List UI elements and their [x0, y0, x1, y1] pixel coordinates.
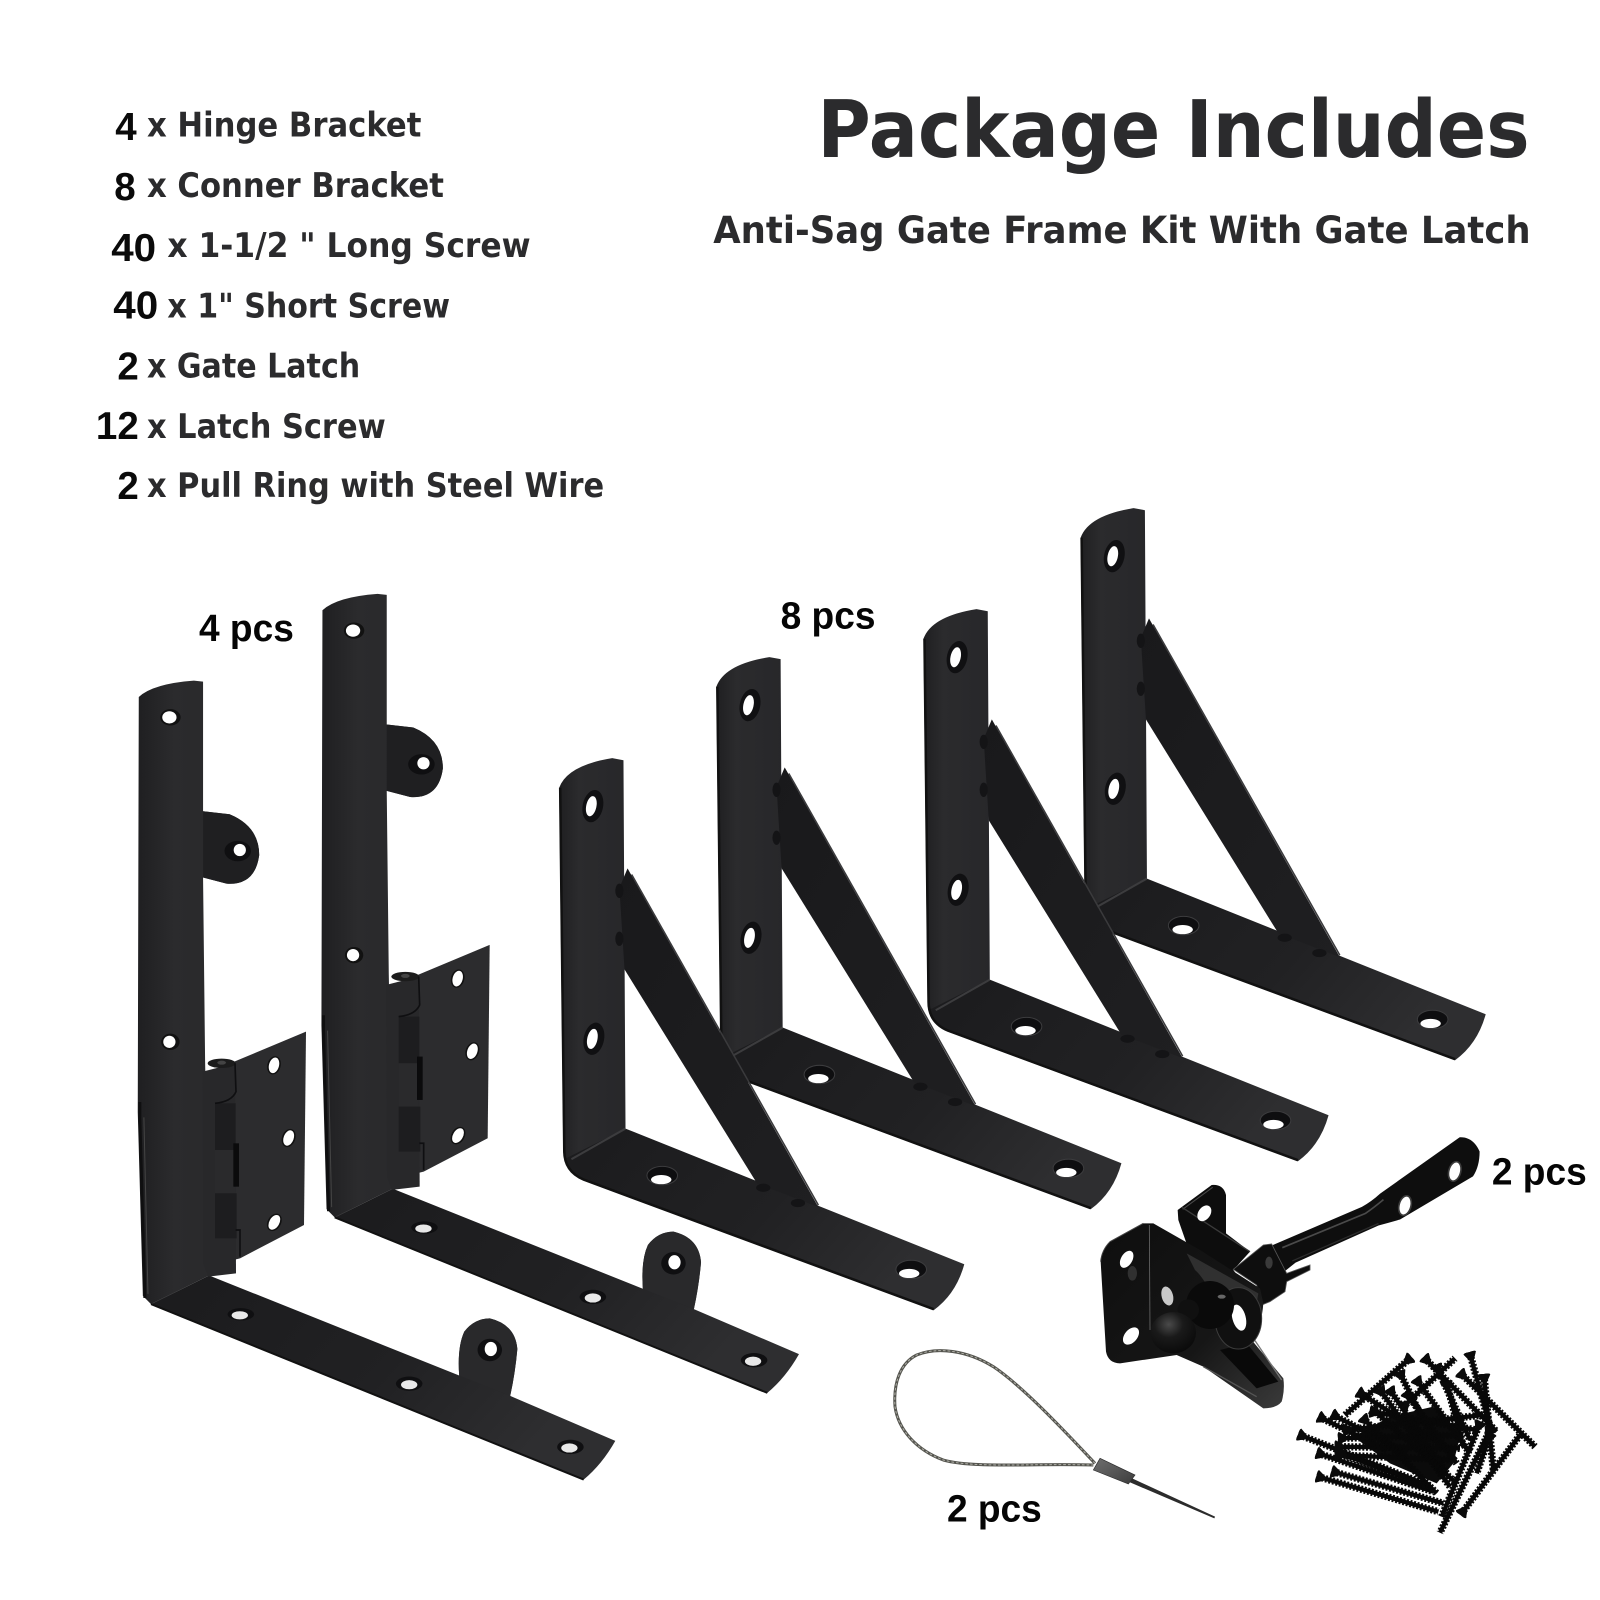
list row: conner bracket: x Conner Bracket — [147, 166, 444, 205]
list row: short screw: x 1" Short Screw — [167, 286, 450, 325]
list row: latch screw — [96, 405, 386, 448]
label: 8 pcs: 8 pcs — [781, 595, 876, 637]
list row: long screw: x 1-1/2 " Long Screw — [167, 226, 531, 265]
latch back plate — [1178, 1185, 1250, 1283]
corner bracket 3 — [923, 609, 1329, 1161]
corner bracket 1 — [559, 758, 964, 1310]
latch pivot — [1233, 1244, 1310, 1305]
label: 4 pcs: 4 pcs — [199, 607, 294, 649]
label: 2 pcs wire: 2 pcs — [947, 1487, 1042, 1529]
latch body — [1101, 1185, 1310, 1408]
list row: latch screw: x Latch Screw — [147, 407, 386, 446]
list row: hinge bracket: 4 — [115, 106, 137, 149]
list row: long screw: 40 — [111, 227, 156, 270]
subtitle: Anti-Sag Gate Frame Kit With Gate Latch — [713, 208, 1531, 252]
list row: hinge bracket: x Hinge Bracket — [147, 106, 421, 145]
wire ferrule — [1093, 1458, 1135, 1484]
list row: short screw — [113, 284, 450, 327]
list row: gate latch: x Gate Latch — [147, 347, 360, 386]
hinge bracket front — [138, 681, 615, 1480]
wire tail — [1128, 1477, 1215, 1518]
list row: pull ring: x Pull Ring with Steel Wire — [147, 466, 604, 505]
latch knob — [1151, 1281, 1234, 1353]
list row: gate latch: 2 — [117, 346, 139, 389]
list row: short screw: 40 — [113, 284, 158, 327]
corner bracket 4 — [1081, 508, 1486, 1060]
latch front plate — [1101, 1223, 1284, 1408]
latch handle — [1259, 1137, 1480, 1276]
package contents list — [96, 106, 604, 508]
label: 2 pcs latch: 2 pcs — [1492, 1151, 1587, 1193]
list row: latch screw: 12 — [96, 405, 139, 448]
gate latch — [1101, 1137, 1480, 1408]
pile of screws — [1300, 1354, 1535, 1533]
wire loop — [895, 1351, 1095, 1465]
title: Package Includes — [817, 83, 1530, 176]
list row: pull ring: 2 — [117, 465, 139, 508]
list row: conner bracket: 8 — [114, 166, 136, 209]
hinge bracket rear — [321, 594, 799, 1393]
corner bracket 2 — [716, 657, 1121, 1209]
pull wire — [895, 1351, 1215, 1518]
